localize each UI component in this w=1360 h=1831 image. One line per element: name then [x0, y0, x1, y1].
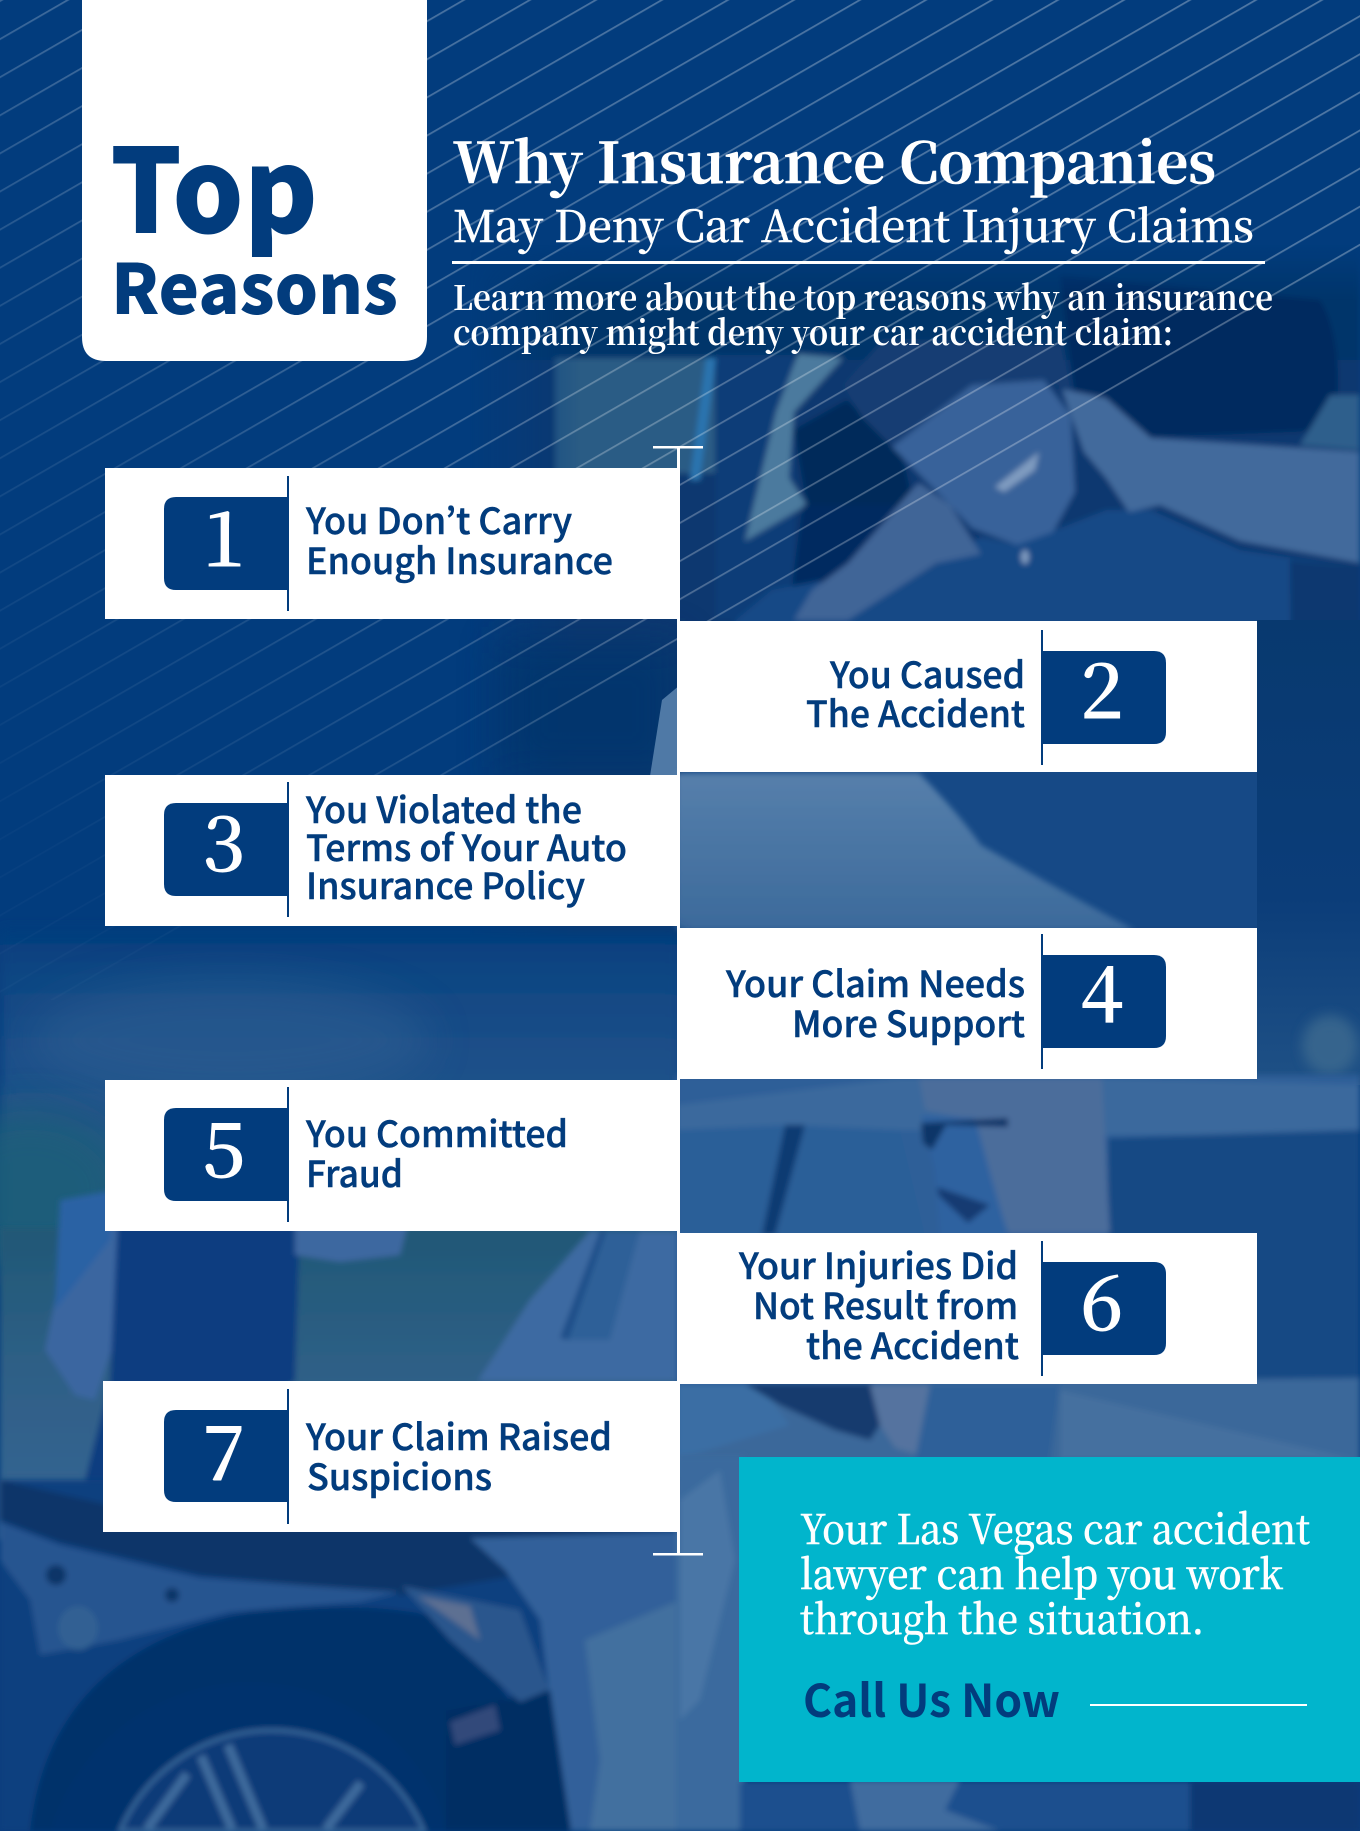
background photo: injured driver in car — [516, 268, 1360, 928]
man's right arm — [1062, 389, 1360, 563]
woman's hair — [919, 1078, 1110, 1233]
reason card 7 — [103, 1381, 680, 1532]
reason card 5 — [105, 1080, 680, 1231]
decorative diagonal light lines — [0, 0, 1360, 825]
call to action message: lawyer can help you work — [800, 1542, 1284, 1601]
reason card 2: You Caused — [829, 647, 1025, 699]
call to action message: Your Las Vegas car accident — [800, 1497, 1310, 1556]
reason card 4: Your Claim Needs — [725, 956, 1025, 1008]
man's shirt — [680, 510, 1360, 930]
background photo: damaged car front — [0, 1455, 1360, 1831]
secondary heading line: May Deny Car Accident Injury Claims — [453, 191, 1254, 255]
wheel arch — [30, 1607, 575, 1831]
reason card 1: You Don’t Carry — [305, 493, 572, 545]
reason card 3: Terms of Your Auto — [306, 820, 627, 872]
tyre — [51, 1684, 449, 1831]
background photo: man on phone by roadside — [0, 1190, 680, 1540]
reason card 1 — [105, 468, 680, 619]
background photo: airbag — [676, 773, 1135, 930]
timeline axis with end caps — [653, 446, 703, 1556]
reason card 2 — [677, 621, 1257, 772]
reason card 7: Suspicions — [307, 1449, 492, 1501]
reason card 6: Not Result from — [753, 1278, 1018, 1330]
reason card 4: More Support — [792, 996, 1025, 1048]
man's teeth — [995, 452, 1039, 492]
headlight — [402, 1586, 549, 1702]
reason card 6: Your Injuries Did — [738, 1238, 1018, 1290]
reason card 6 — [677, 1233, 1257, 1384]
title word: Top: Top — [110, 97, 318, 267]
fender — [0, 1522, 400, 1655]
reason card 2: The Accident — [806, 686, 1025, 738]
panel: call to action — [739, 1457, 1360, 1782]
rim — [120, 1730, 424, 1831]
reason card 6: 6 — [1081, 1243, 1123, 1352]
call to action message: through the situation. — [800, 1587, 1204, 1646]
reason card 3 — [105, 775, 680, 926]
arrow line — [1090, 1704, 1307, 1706]
reason card 1: Enough Insurance — [306, 533, 613, 585]
woman's phone — [937, 1187, 990, 1223]
background photo: woman on phone beside car — [676, 1075, 1360, 1475]
intro text: Learn more about the top reasons why an insurance — [453, 271, 1273, 320]
reason card 2: 2 — [1081, 631, 1123, 740]
reason card 6: the Accident — [806, 1318, 1019, 1370]
reason card 5: 5 — [203, 1090, 245, 1199]
woman's sunglasses — [921, 1118, 1008, 1150]
reason card 3: 3 — [203, 784, 245, 893]
reason card 5: Fraud — [306, 1146, 403, 1198]
heading block: company might deny your car accident claim: — [453, 306, 1173, 355]
call to action message — [800, 1497, 1310, 1646]
reason card 7: 7 — [203, 1393, 245, 1502]
front panel of damaged car — [470, 1532, 680, 1831]
title word: Reasons: Reasons — [111, 234, 398, 334]
call us now label: Call Us Now — [803, 1665, 1060, 1730]
main heading line: Why Insurance Companies — [453, 120, 1216, 200]
hood shadow — [0, 1480, 680, 1595]
background: blurred foliage band — [0, 930, 682, 1260]
reason card 5: You Committed — [305, 1106, 568, 1158]
man's face — [892, 380, 1075, 545]
right headrest — [1060, 275, 1338, 440]
panel: top reasons title card — [82, 0, 427, 361]
reason card 3: Insurance Policy — [306, 858, 585, 910]
reason card 4 — [677, 928, 1257, 1079]
man's hair — [843, 340, 1071, 447]
reason card 7: Your Claim Raised — [305, 1409, 612, 1461]
reason card 4: 4 — [1081, 934, 1123, 1043]
reason card 3: You Violated the — [305, 782, 582, 834]
background: dark column behind left side — [500, 640, 680, 780]
heading block — [452, 120, 1273, 355]
reason card 1: 1 — [203, 479, 245, 588]
heading rule — [452, 261, 1265, 264]
woman's face — [921, 1115, 1008, 1235]
man's left arm — [794, 483, 981, 620]
